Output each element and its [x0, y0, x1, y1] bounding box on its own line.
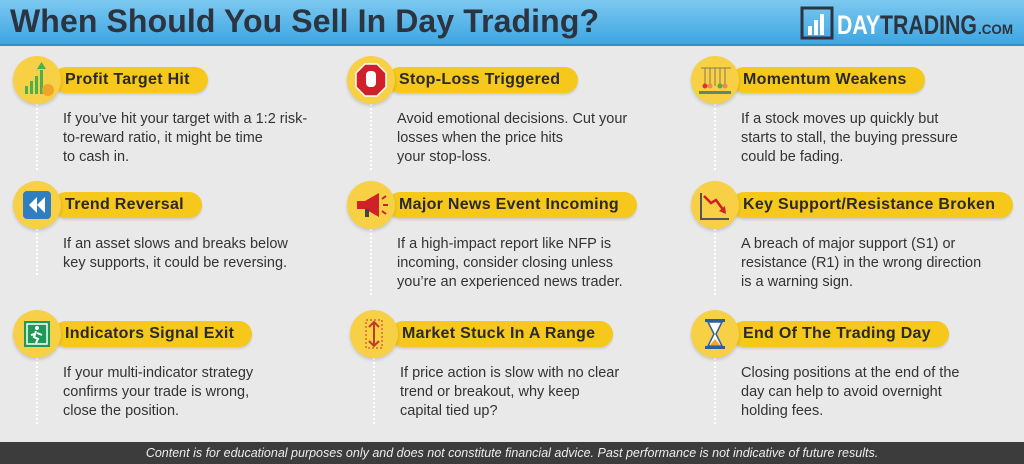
- text: [741, 111, 958, 165]
- text: If you’ve hit your target with a 1:2 risk-: [63, 111, 307, 127]
- label: [731, 321, 949, 347]
- text: [400, 365, 619, 419]
- label: Major News Event Incoming: [399, 196, 619, 213]
- label: Profit Target Hit: [65, 71, 190, 88]
- logo: .COM: [978, 21, 1013, 37]
- text: If price action is slow with no clear: [400, 365, 619, 381]
- text: capital tied up?: [400, 403, 498, 419]
- text: Avoid emotional decisions. Cut your: [397, 111, 627, 127]
- text: holding fees.: [741, 403, 823, 419]
- text: to-reward ratio, it might be time: [63, 130, 263, 146]
- card: range: [349, 310, 619, 424]
- text: resistance (R1) in the wrong direction: [741, 255, 981, 271]
- card: profit target: [12, 56, 307, 170]
- footer disclaimer: [0, 442, 1024, 464]
- card: indicators exit: [12, 310, 254, 424]
- icon: range arrows: [350, 310, 398, 358]
- icon: exit sign: [13, 310, 61, 358]
- label: Key Support/Resistance Broken: [743, 196, 995, 213]
- text: incoming, consider closing unless: [397, 255, 613, 271]
- logo: DAYTRADING: [837, 10, 977, 40]
- text: Closing positions at the end of the: [741, 365, 959, 381]
- text: to cash in.: [63, 149, 129, 165]
- label: Stop-Loss Triggered: [399, 71, 560, 88]
- text: confirms your trade is wrong,: [63, 384, 249, 400]
- label: [387, 192, 637, 218]
- text: [63, 365, 254, 419]
- text: [741, 236, 981, 290]
- text: If a stock moves up quickly but: [741, 111, 938, 127]
- card: trend reversal: [12, 181, 288, 275]
- text: [397, 236, 623, 290]
- text: starts to stall, the buying pressure: [741, 130, 958, 146]
- card: end of day: [690, 310, 959, 424]
- text: close the position.: [63, 403, 179, 419]
- text: your stop-loss.: [397, 149, 491, 165]
- text: If an asset slows and breaks below: [63, 236, 288, 252]
- label: [53, 192, 202, 218]
- label: End Of The Trading Day: [743, 325, 931, 342]
- text: could be fading.: [741, 149, 843, 165]
- text: trend or breakout, why keep: [400, 384, 580, 400]
- icon: stop sign: [347, 56, 395, 104]
- label: Trend Reversal: [65, 196, 184, 213]
- text: A breach of major support (S1) or: [741, 236, 955, 252]
- icon: rewind: [13, 181, 61, 229]
- footer disclaimer: Content is for educational purposes only and does not constitute financial advice. Past performance is not indicative of future results.: [146, 446, 878, 460]
- label: [390, 321, 613, 347]
- header bar: [0, 0, 1024, 46]
- icon: hourglass: [691, 310, 739, 358]
- card: momentum: [690, 56, 958, 170]
- text: [741, 365, 959, 419]
- card: stop loss: [346, 56, 627, 170]
- label: [387, 67, 578, 93]
- label: Momentum Weakens: [743, 71, 907, 88]
- text: [63, 236, 288, 271]
- icon: down chart: [691, 181, 739, 229]
- text: [397, 111, 627, 165]
- icon: newton cradle: [691, 56, 739, 104]
- text: losses when the price hits: [397, 130, 563, 146]
- label: [731, 67, 925, 93]
- logo: [800, 6, 1013, 40]
- icon: bar chart coin: [13, 56, 61, 104]
- icon: megaphone: [347, 181, 395, 229]
- label: [53, 321, 252, 347]
- card: news: [346, 181, 638, 295]
- card: support resistance: [690, 181, 1014, 295]
- text: If a high-impact report like NFP is: [397, 236, 611, 252]
- label: Market Stuck In A Range: [402, 325, 595, 342]
- text: If your multi-indicator strategy: [63, 365, 253, 381]
- text: [63, 111, 307, 165]
- text: day can help to avoid overnight: [741, 384, 942, 400]
- text: is a warning sign.: [741, 274, 853, 290]
- text: key supports, it could be reversing.: [63, 255, 287, 271]
- label: Indicators Signal Exit: [65, 325, 234, 342]
- text: you’re an experienced news trader.: [397, 274, 623, 290]
- title: When Should You Sell In Day Trading?: [10, 3, 599, 39]
- label: [53, 67, 208, 93]
- label: [731, 192, 1013, 218]
